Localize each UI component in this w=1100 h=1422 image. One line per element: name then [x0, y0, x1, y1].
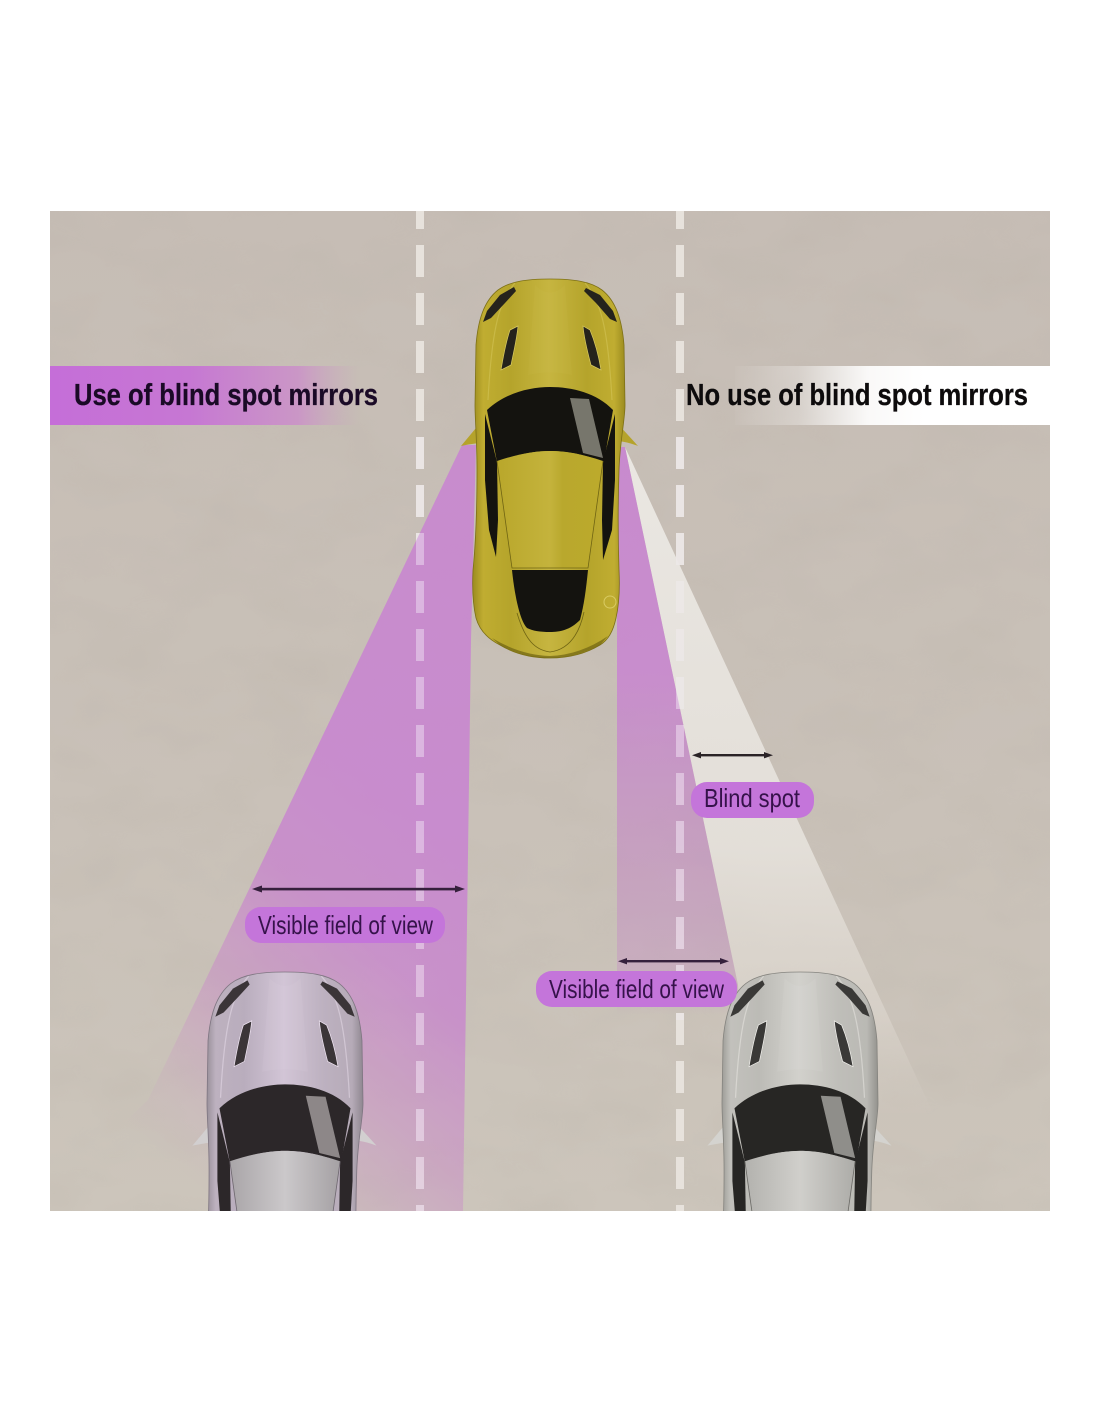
- heading: no use of blind spot mirrors: [686, 366, 1050, 425]
- label: blind spot: Blind spot: [704, 783, 801, 813]
- label: visible field of view right: [536, 971, 737, 1007]
- visible field beam: right mirror: [617, 447, 742, 1015]
- silver car: [708, 972, 891, 1211]
- visible field beam: left mirror: [163, 445, 476, 1211]
- lilac car: [192, 972, 376, 1211]
- lane markings: [420, 197, 680, 1211]
- heading: no use of blind spot mirrors: No use of blind spot mirrors: [686, 377, 1028, 412]
- label: visible field of view left: [245, 907, 445, 943]
- heading: use of blind spot mirrors: [50, 366, 378, 425]
- blind spot beam: [625, 448, 904, 1054]
- arrow: left field width: [252, 886, 465, 892]
- heading: use of blind spot mirrors: Use of blind spot mirrors: [74, 377, 378, 412]
- label: visible field of view right: Visible field of view: [549, 974, 724, 1004]
- lane markings inside beams: [420, 437, 680, 1211]
- arrow: right field width: [618, 958, 729, 964]
- label: visible field of view left: Visible field of view: [258, 910, 433, 940]
- arrow: blind spot width: [692, 752, 773, 758]
- yellow car: [461, 279, 638, 658]
- road surface: [50, 211, 1050, 1211]
